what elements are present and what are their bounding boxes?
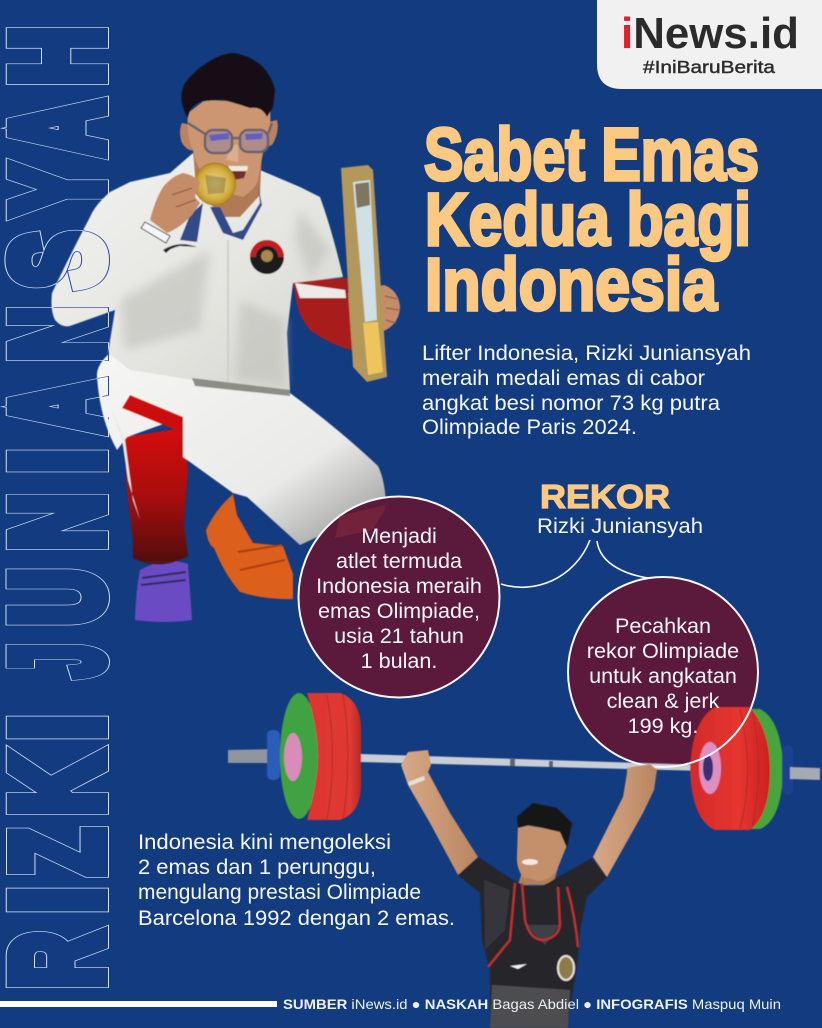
face [188,100,270,197]
footer rule [0,1001,277,1007]
ears [180,120,278,150]
white trousers [97,353,386,545]
circle text: olympic record: Pecahkan [615,613,711,638]
trophy hand [342,285,400,342]
jacket folds [120,210,330,385]
footer credits: SUMBER iNews.id ● NASKAH Bagas Abdiel ● INFOGRAFIS Maspuq Muin [283,996,781,1012]
achievement text: Barcelona 1992 dengan 2 emas. [138,905,455,930]
singlet and shirt [458,857,607,1028]
connector lines [501,540,655,587]
medal [194,163,236,205]
left red plates [307,693,361,820]
red trouser leg [124,428,188,565]
circle: youngest athlete: emas Olimpiade, [318,598,480,623]
glasses [188,123,272,153]
medal ribbon [180,185,262,242]
intro text: Lifter Indonesia, Rizki Juniansyah [422,340,751,365]
circle: youngest athlete: Menjadi [361,523,437,548]
achievement text: mengulang prestasi Olimpiade [138,879,421,904]
circle outline: olympic record [568,577,758,767]
lifter mouth [522,859,538,865]
hand [150,173,200,233]
bar [360,754,705,771]
white stripe beside knee [110,405,140,520]
title: Indonesia [425,243,718,326]
right pink hub [699,742,721,794]
photo: lifter holding barbell [401,750,657,1028]
singlet logo [510,964,527,969]
circle: youngest athlete: usia 21 tahun [334,623,464,648]
right clamp [782,745,793,795]
purple shoe [135,561,192,622]
wrist band [141,222,170,243]
intro text: meraih medali emas di cabor [422,365,705,390]
left clamp [267,730,280,780]
intro text [422,340,751,439]
photo: athlete kissing medal [51,53,400,622]
arms [401,750,478,875]
singlet emblem [558,956,574,980]
blue name outline over athlete [54,230,110,421]
circle text: olympic record: rekor Olimpiade [587,638,739,663]
circle: youngest athlete: 1 bulan. [361,648,437,673]
lifter hair [517,803,572,848]
national emblem [250,240,284,274]
logo wordmark: iNews.id [621,9,799,58]
logo tagline: #IniBaruBerita [643,57,775,77]
circle text: olympic record [587,613,739,738]
circle text: olympic record: clean & jerk [607,688,720,713]
left green plate [280,693,318,819]
achievement text: 2 emas dan 1 perunggu, [138,854,376,879]
intro text: Olimpiade Paris 2024. [422,414,637,439]
jacket [51,153,343,390]
title [424,113,759,326]
circle: youngest athlete [298,496,500,698]
red sleeve [293,278,352,350]
achievement text: Indonesia kini mengoleksi [138,829,391,854]
circle: youngest athlete: atlet termuda [336,548,463,573]
heading: rekor: REKOR [540,478,670,515]
left bar end [228,749,280,763]
right red plates [690,707,770,830]
red knee band [122,395,183,433]
singlet piping [488,883,578,967]
circle text: olympic record: untuk angkatan [589,663,737,688]
intro text: angkat besi nomor 73 kg putra [422,390,721,415]
orange shoe [206,494,293,599]
circle text: olympic record: 199 kg. [628,713,698,738]
barbell [228,693,820,830]
chest logo [163,244,197,253]
lifter face [517,824,568,881]
title: Kedua bagi [425,178,751,261]
wrist band [408,776,425,786]
neck [518,868,558,885]
mouth [227,166,248,180]
achievement text [138,829,455,930]
right bar end [790,767,820,780]
circle fill: olympic record [568,577,758,767]
right green plate [745,709,783,829]
trophy box [341,165,387,382]
left pink hub [284,733,302,781]
neck [193,150,262,217]
subheading: name: Rizki Juniansyah [537,513,703,538]
logo panel [597,0,822,89]
circle: youngest athlete: Indonesia meraih [316,573,482,598]
hair [181,53,275,118]
belt [490,985,570,1028]
vertical outlined name [0,26,130,988]
